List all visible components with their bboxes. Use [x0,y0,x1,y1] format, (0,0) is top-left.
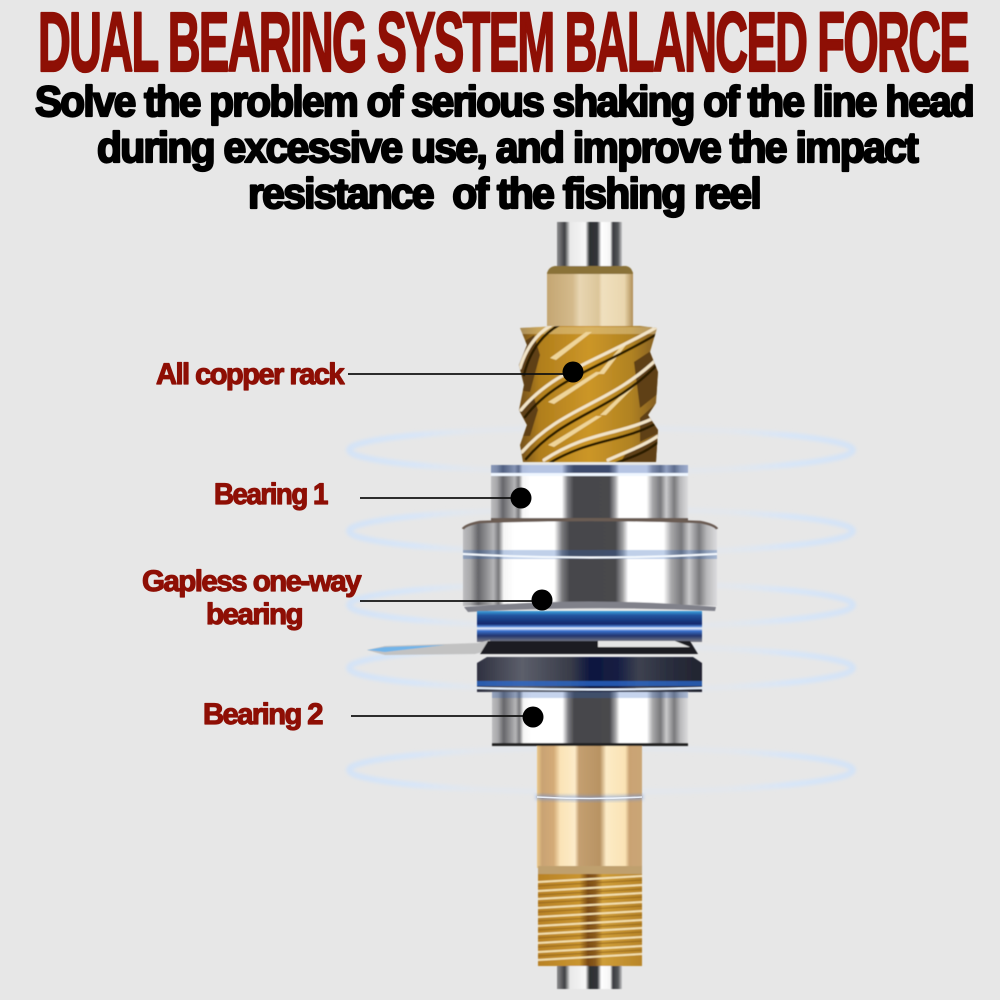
fishing reel shaft assembly [367,222,717,989]
motion orbits behind the shaft [349,428,853,792]
label: all copper rack: All copper rack [156,358,345,391]
lower brass shaft [537,746,642,876]
label: bearing 1 [214,478,532,511]
blue ring [477,611,702,642]
threaded brass section [538,874,642,966]
label: bearing 2: Bearing 2 [203,698,323,731]
all copper rack gear [518,320,660,466]
subtitle [35,78,973,218]
label: bearing 2 [203,698,544,731]
bearing 1 [491,465,688,521]
top steel shaft [557,222,622,268]
one-way clutch spring [367,640,698,655]
subtitle: resistance of the fishing reel [248,170,760,218]
label: gapless one-way bearing: Gapless one-way [142,565,362,598]
gapless one-way bearing housing [463,520,717,606]
label: gapless one-way bearing [142,565,552,631]
label: bearing 1: Bearing 1 [214,478,328,511]
lip below housing [464,602,716,612]
bottom steel shaft [557,966,622,989]
brass collar [547,266,633,326]
label: gapless one-way bearing: bearing [206,598,302,631]
glowing orbit line across lower brass [536,797,643,798]
bearing 2 [492,692,688,746]
subtitle: during excessive use, and improve the impact [97,124,918,172]
black ring [477,657,702,692]
label: all copper rack [156,358,584,391]
